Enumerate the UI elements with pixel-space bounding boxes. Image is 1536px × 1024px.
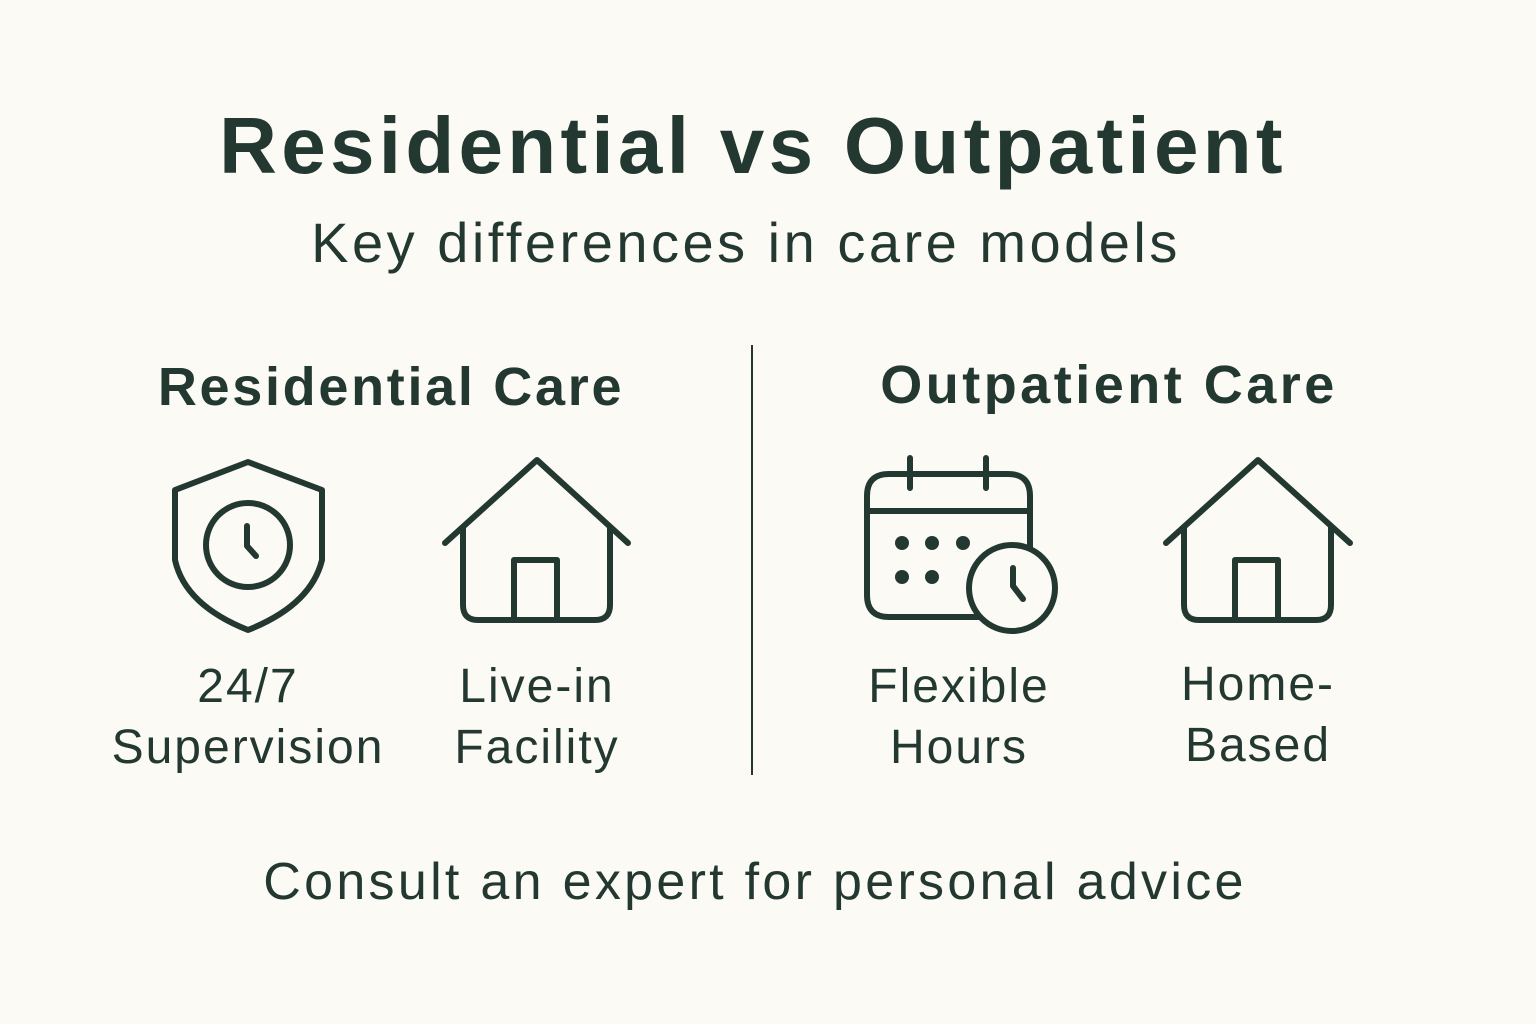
label: home-based <box>1181 658 1335 772</box>
label: live-in facility: Facility <box>454 721 620 774</box>
heading: outpatient: Outpatient Care <box>880 355 1338 415</box>
heading: residential: Residential Care <box>158 357 624 417</box>
icon: house 2 <box>1166 460 1350 620</box>
icon: shield clock <box>175 462 322 630</box>
divider <box>751 345 753 775</box>
label: flexible hours: Flexible <box>868 660 1050 713</box>
label: 24/7 supervision <box>112 660 384 774</box>
icon: house 1 <box>445 460 628 620</box>
label: live-in facility <box>454 660 620 774</box>
label: home-based: Based <box>1185 719 1331 772</box>
title: Residential vs Outpatient <box>219 101 1287 190</box>
label: flexible hours: Hours <box>890 721 1028 774</box>
label: 24/7 supervision: Supervision <box>112 721 384 774</box>
label: home-based: Home- <box>1181 658 1335 711</box>
label: live-in facility: Live-in <box>459 660 615 713</box>
subtitle: Key differences in care models <box>311 211 1181 274</box>
footer: Consult an expert for personal advice <box>263 853 1247 911</box>
icon: calendar clock <box>867 458 1055 631</box>
label: flexible hours <box>868 660 1050 774</box>
label: 24/7 supervision: 24/7 <box>197 660 299 713</box>
